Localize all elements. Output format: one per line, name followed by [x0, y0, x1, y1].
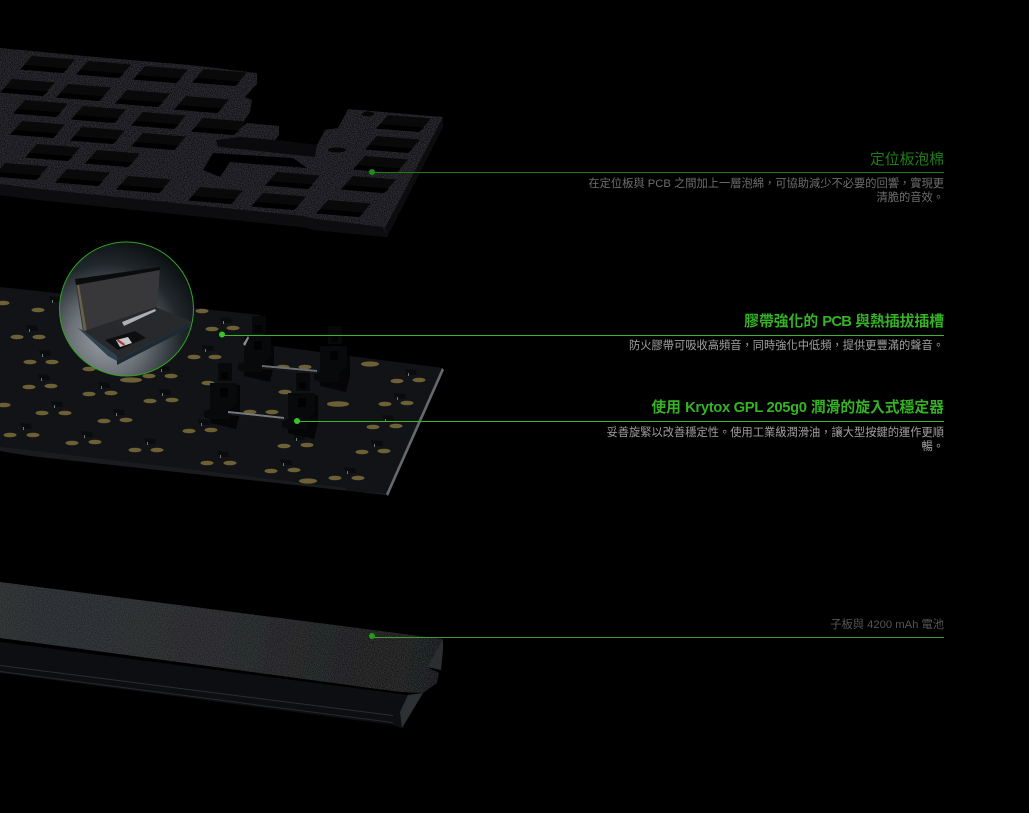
inset photo: keyboard opened [60, 242, 194, 376]
switch markers [20, 296, 417, 474]
foam layer [0, 48, 443, 237]
heading: foam: 定位板泡棉 [870, 152, 944, 168]
plate edge highlight [386, 368, 444, 496]
text: stabilizer description: 妥善旋緊以改善穩定性。使用工業級潤滑油，讓大型按鍵的運作更順暢。 [606, 427, 944, 453]
text: foam description: 在定位板與 PCB 之間加上一層泡綿，可協助減少不必要的回響，實現更清脆的音效。 [588, 178, 944, 204]
keyboard base [84, 307, 193, 360]
foam notch [203, 153, 307, 177]
label: daughterboard and battery: 子板與 4200 mAh 電池 [830, 619, 944, 631]
heading: PCB: 膠帶強化的 PCB 與熱插拔插槽 [744, 314, 944, 330]
text: PCB description: 防火膠帶可吸收高頻音，同時強化中低頻，提供更豐滿的聲音。 [629, 340, 944, 352]
textured top sheet [0, 582, 443, 693]
callout line: PCB [219, 332, 944, 338]
bottom plate and battery [0, 582, 443, 728]
stabilizer: lower [204, 363, 318, 439]
callout line: stabilizer [294, 418, 944, 424]
callout line: daughterboard [369, 633, 944, 639]
stabilizer: upper [238, 316, 350, 392]
callout line: foam [369, 169, 944, 175]
PCB plate [0, 287, 444, 496]
gold solder pads [0, 301, 426, 484]
keyboard lid [75, 267, 160, 332]
heading: stabilizer: 使用 Krytox GPL 205g0 潤滑的旋入式穩定器 [651, 400, 944, 416]
